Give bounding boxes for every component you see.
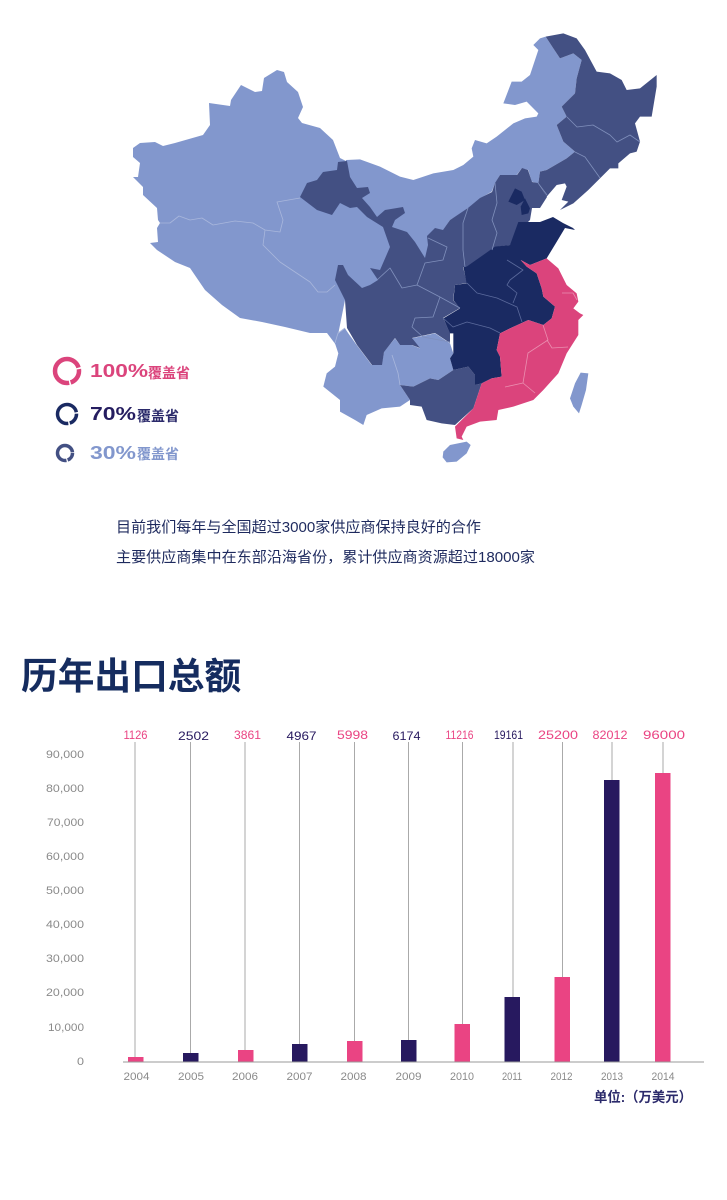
province borders, central and northeast xyxy=(377,117,640,342)
legend: coverage levels xyxy=(55,359,190,463)
legend item: 100% xyxy=(55,359,190,383)
legend item: 30% xyxy=(58,443,179,463)
value labels: 11216 xyxy=(446,728,474,742)
unit note: 单位:（万美元） xyxy=(594,1089,692,1105)
year labels: 2009 xyxy=(396,1071,422,1083)
region: Tianjin, navy xyxy=(521,198,530,215)
year labels: 2007 xyxy=(286,1071,312,1083)
y axis labels: 0 xyxy=(77,1056,84,1068)
region: Beijing, navy xyxy=(508,188,525,205)
region: Yunnan and Guizhou, light xyxy=(323,328,453,425)
y axis labels xyxy=(46,749,84,1068)
y axis labels: 90,000 xyxy=(46,749,84,761)
region: Guangxi, medium blue xyxy=(400,367,482,425)
value labels: 3861 xyxy=(234,728,261,742)
region: Shandong, Henan, Anhui, Hubei, Hunan, navy xyxy=(443,217,575,385)
legend item: 30%: 覆盖省 xyxy=(137,446,179,462)
legend item: 100%: 100% xyxy=(90,361,148,381)
year labels: 2012 xyxy=(550,1071,572,1083)
text block: supplier summary: 目前我们每年与全国超过3000家供应商保持良好的合作 xyxy=(116,518,481,536)
region: west provinces, light xyxy=(133,70,430,345)
value labels: 2502 xyxy=(178,729,209,743)
value labels: 4967 xyxy=(286,729,317,743)
year labels: 2005 xyxy=(178,1071,204,1083)
value labels: 96000 xyxy=(643,728,685,742)
region: east coast provinces, pink xyxy=(455,258,583,440)
region: Taiwan, light xyxy=(570,373,588,413)
y axis labels: 50,000 xyxy=(46,885,84,897)
legend item: 70%: 70% xyxy=(90,404,136,424)
heading: annual export total: 历年出口总额 xyxy=(21,656,241,697)
year labels: 2010 xyxy=(450,1071,474,1083)
legend item: 70%: 覆盖省 xyxy=(137,408,179,424)
bar chart: annual export totals 2004-2014 xyxy=(46,728,704,1083)
region: Hainan, light xyxy=(443,442,471,462)
text block: supplier summary xyxy=(116,518,535,566)
province borders, navy area xyxy=(443,260,523,333)
y axis labels: 70,000 xyxy=(47,817,84,829)
stems xyxy=(135,742,663,1057)
y axis labels: 10,000 xyxy=(48,1022,84,1034)
year labels xyxy=(124,1071,674,1083)
year labels: 2006 xyxy=(232,1071,258,1083)
legend item: 100%: 覆盖省 xyxy=(148,365,190,381)
y axis labels: 40,000 xyxy=(46,919,84,931)
legend item: 30%: 30% xyxy=(90,443,136,463)
bars xyxy=(128,773,670,1062)
year labels: 2004 xyxy=(124,1071,150,1083)
value labels: 5998 xyxy=(337,728,368,742)
year labels: 2008 xyxy=(340,1071,366,1083)
value labels xyxy=(124,728,685,743)
region: Northeast provinces, medium blue xyxy=(538,33,657,210)
text block: supplier summary: 主要供应商集中在东部沿海省份，累计供应商资源超过18000家 xyxy=(116,548,535,566)
legend item: 70% xyxy=(58,404,179,424)
region: Inner Mongolia, light xyxy=(346,37,582,273)
y axis labels: 30,000 xyxy=(46,953,84,965)
y axis labels: 20,000 xyxy=(46,987,84,999)
year labels: 2011 xyxy=(502,1071,522,1083)
value labels: 1126 xyxy=(124,728,148,742)
value labels: 82012 xyxy=(592,728,628,742)
x axis xyxy=(123,1061,704,1063)
y axis labels: 80,000 xyxy=(46,783,84,795)
province borders, pink area xyxy=(505,293,577,393)
map of China coloured by supplier coverage xyxy=(133,33,657,462)
year labels: 2013 xyxy=(601,1071,623,1083)
year labels: 2014 xyxy=(652,1071,674,1083)
value labels: 19161 xyxy=(494,728,523,742)
province borders, west xyxy=(160,198,400,385)
y axis labels: 60,000 xyxy=(46,851,84,863)
value labels: 25200 xyxy=(538,728,578,742)
value labels: 6174 xyxy=(392,729,421,743)
region: central provinces, medium blue xyxy=(300,161,547,365)
